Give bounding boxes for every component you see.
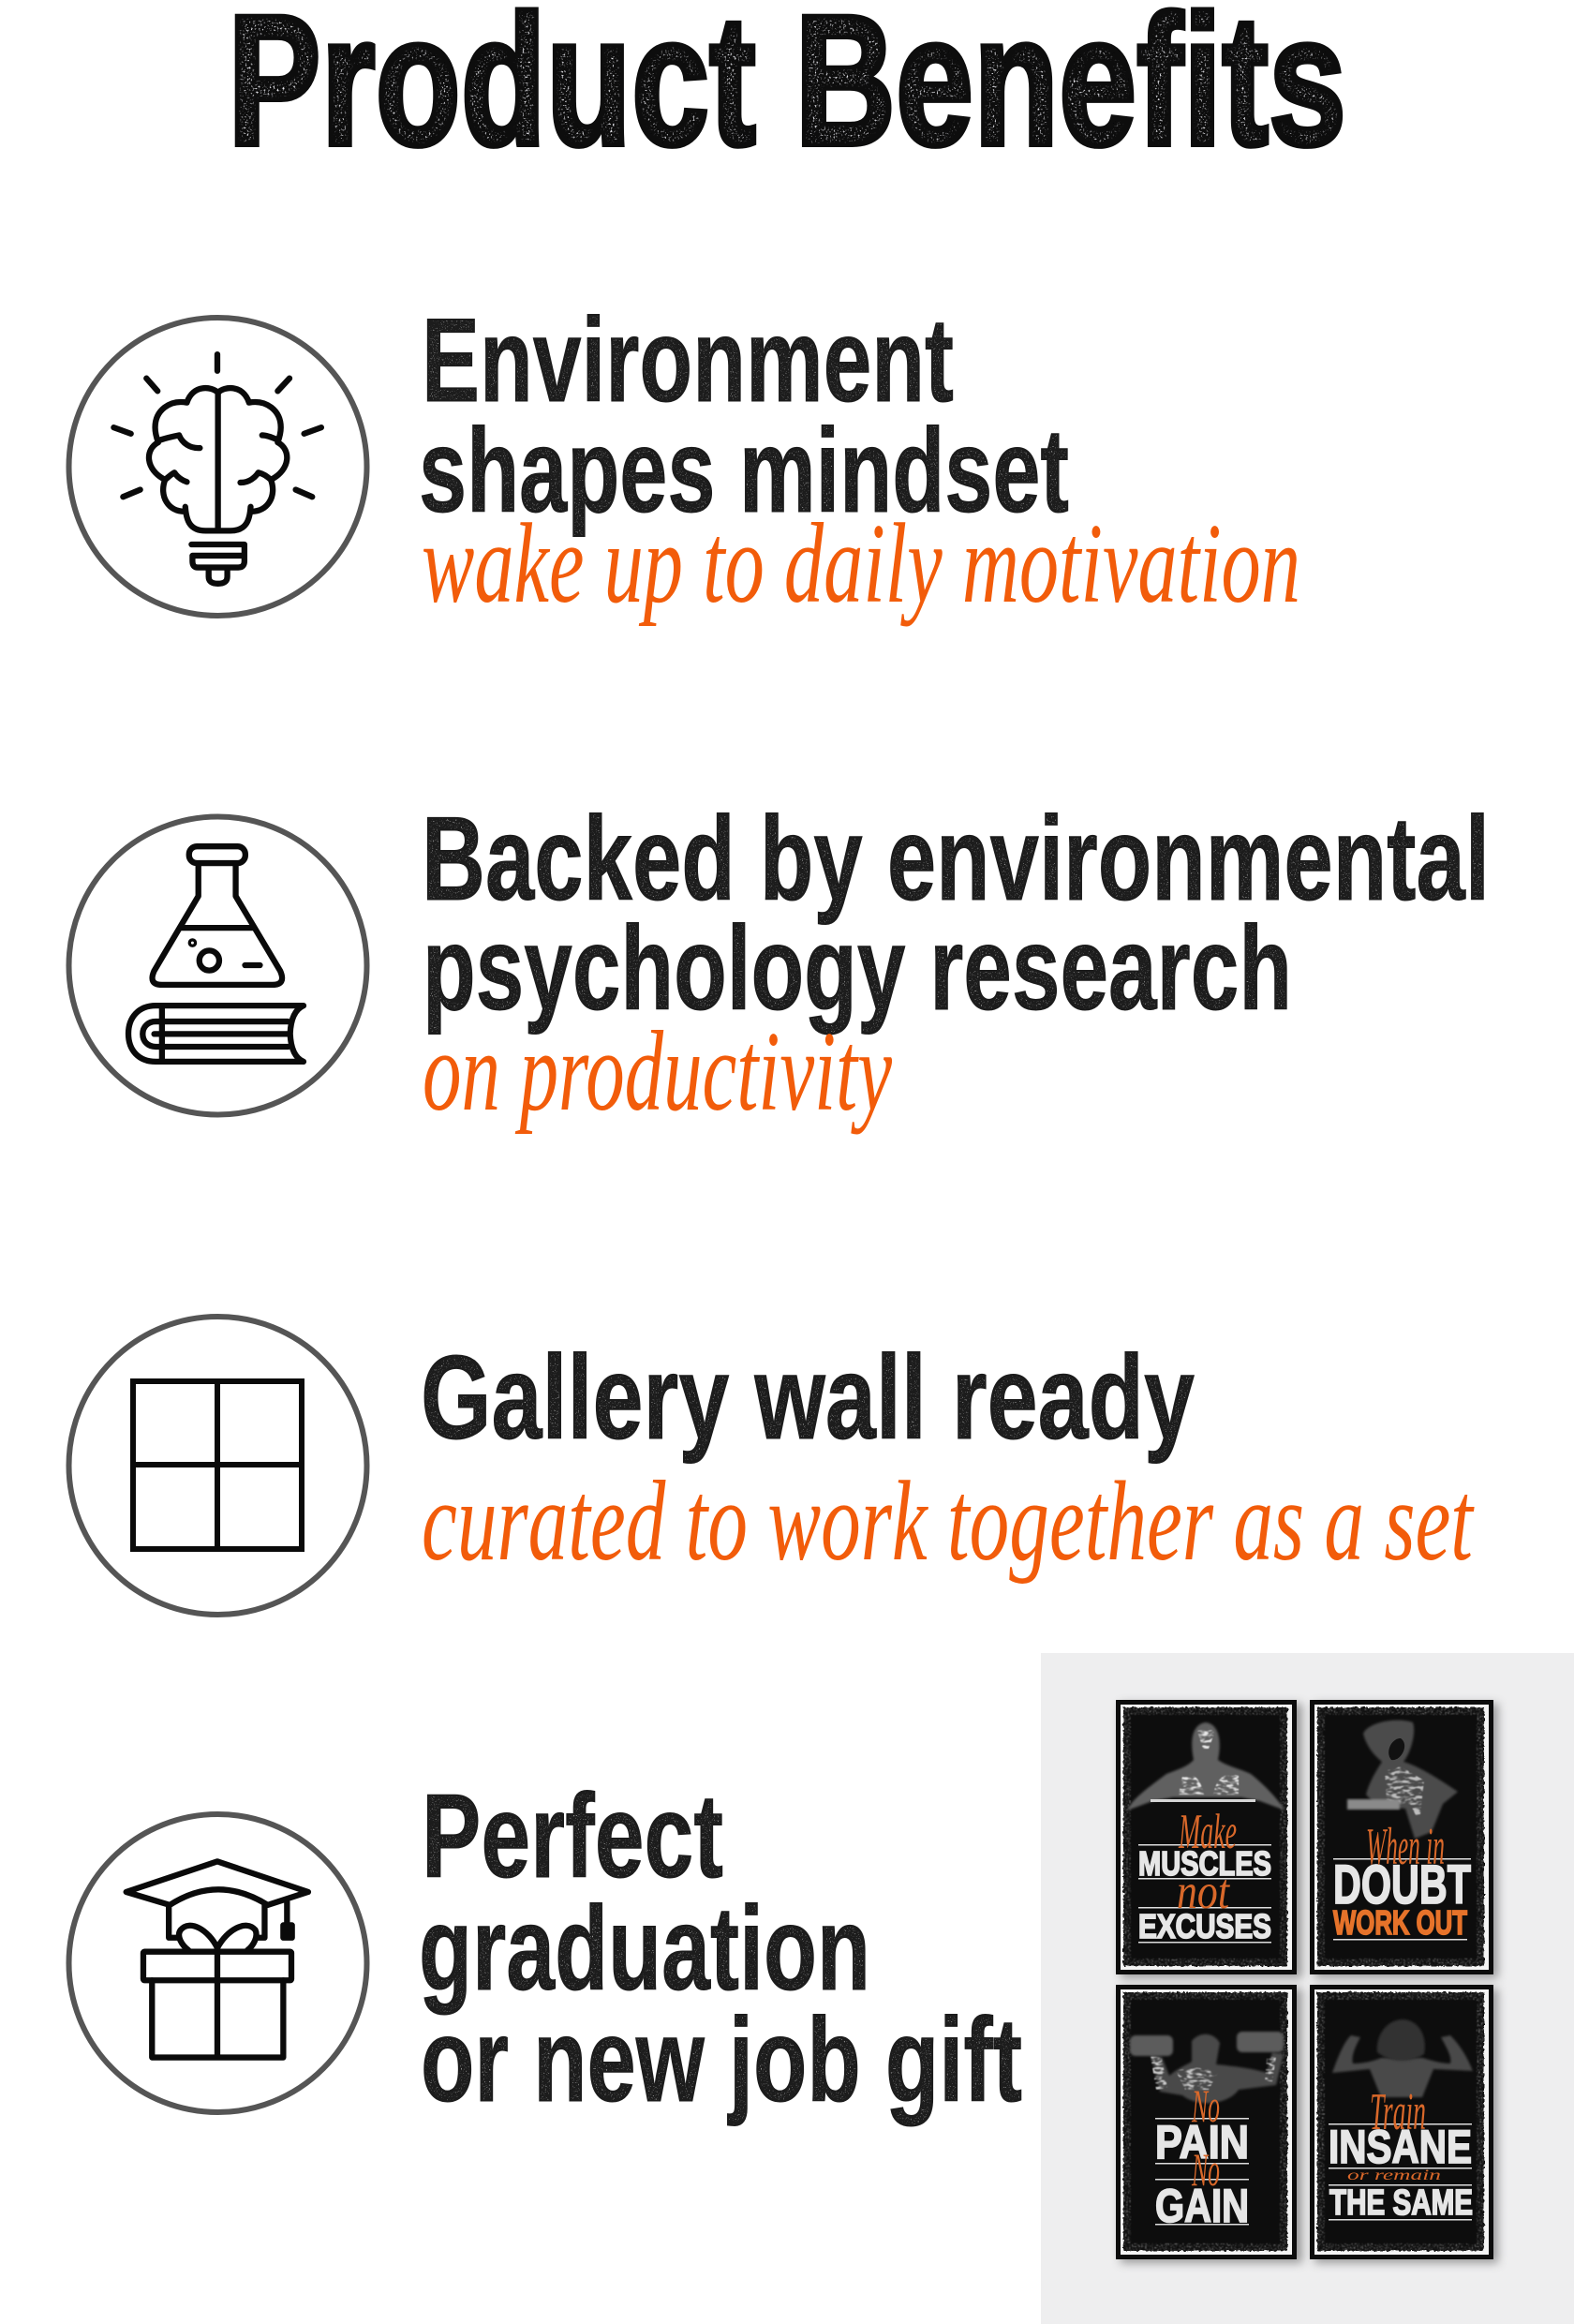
poster: Train insane or remain the same	[1310, 1985, 1498, 2263]
heading: Perfect graduation or new job gift: or new job gift	[421, 1993, 1022, 2126]
heading: Environment shapes mindset	[419, 293, 1069, 537]
poster: Train insane or remain the same: Train	[1370, 2084, 1426, 2141]
poster: When in doubt work out	[1310, 1700, 1498, 1978]
poster: Make muscles not excuses: MUSCLES	[1138, 1844, 1271, 1883]
poster: No pain no gain: GAIN	[1155, 2180, 1249, 2232]
figure: woman flexing from behind	[1332, 2019, 1473, 2097]
poster: Make muscles not excuses: EXCUSES	[1138, 1907, 1271, 1945]
benefit row 2	[69, 792, 1490, 1135]
poster: Train insane or remain the same: or remain	[1347, 2168, 1441, 2183]
product photo panel	[1041, 1653, 1574, 2324]
poster: No pain no gain: PAIN	[1155, 2116, 1249, 2168]
heading: Gallery wall ready: Gallery wall ready	[421, 1331, 1195, 1464]
heading: Perfect graduation or new job gift	[419, 1769, 1022, 2126]
heading: Environment shapes mindset: Environment	[422, 293, 954, 426]
icon: brain light bulb	[69, 318, 367, 616]
icon: four-pane gallery grid	[69, 1317, 367, 1615]
benefit row 3	[69, 1317, 1475, 1615]
figure: man lifting dumbbells	[1130, 2032, 1284, 2103]
script: curated to work together as a set: curated to work together as a set	[422, 1457, 1475, 1585]
script: wake up to daily motivation: wake up to daily motivation	[422, 499, 1300, 627]
poster: No pain no gain: No	[1191, 2080, 1220, 2132]
poster: Make muscles not excuses: Make	[1178, 1805, 1237, 1859]
poster: When in doubt work out: DOUBT	[1333, 1855, 1471, 1915]
figure: man gripping bar	[1127, 1722, 1285, 1810]
poster: No pain no gain: No	[1191, 2144, 1220, 2196]
poster: When in doubt work out: When in	[1366, 1819, 1445, 1876]
benefit row 4	[69, 1769, 1022, 2126]
figure: woman with dumbbell	[1347, 1721, 1458, 1839]
benefit row 1	[69, 293, 1300, 627]
heading: Perfect graduation or new job gift: graduation	[419, 1882, 870, 2015]
poster: Make muscles not excuses	[1116, 1700, 1302, 1978]
heading: Perfect graduation or new job gift: Perfect	[422, 1769, 723, 1902]
heading: Backed by environmental psychology research	[422, 792, 1490, 1035]
icon: flask on book	[69, 817, 367, 1115]
icon: graduation cap on gift box	[69, 1814, 367, 2112]
poster: No pain no gain	[1116, 1985, 1302, 2263]
poster: Train insane or remain the same: INSANE	[1329, 2121, 1472, 2173]
poster: Make muscles not excuses: not	[1177, 1865, 1230, 1919]
poster: When in doubt work out: WORK OUT	[1333, 1903, 1467, 1942]
poster: Train insane or remain the same: THE SAME	[1329, 2183, 1473, 2223]
heading: Environment shapes mindset: shapes mindset	[419, 404, 1069, 537]
script: on productivity: on productivity	[423, 1007, 892, 1135]
